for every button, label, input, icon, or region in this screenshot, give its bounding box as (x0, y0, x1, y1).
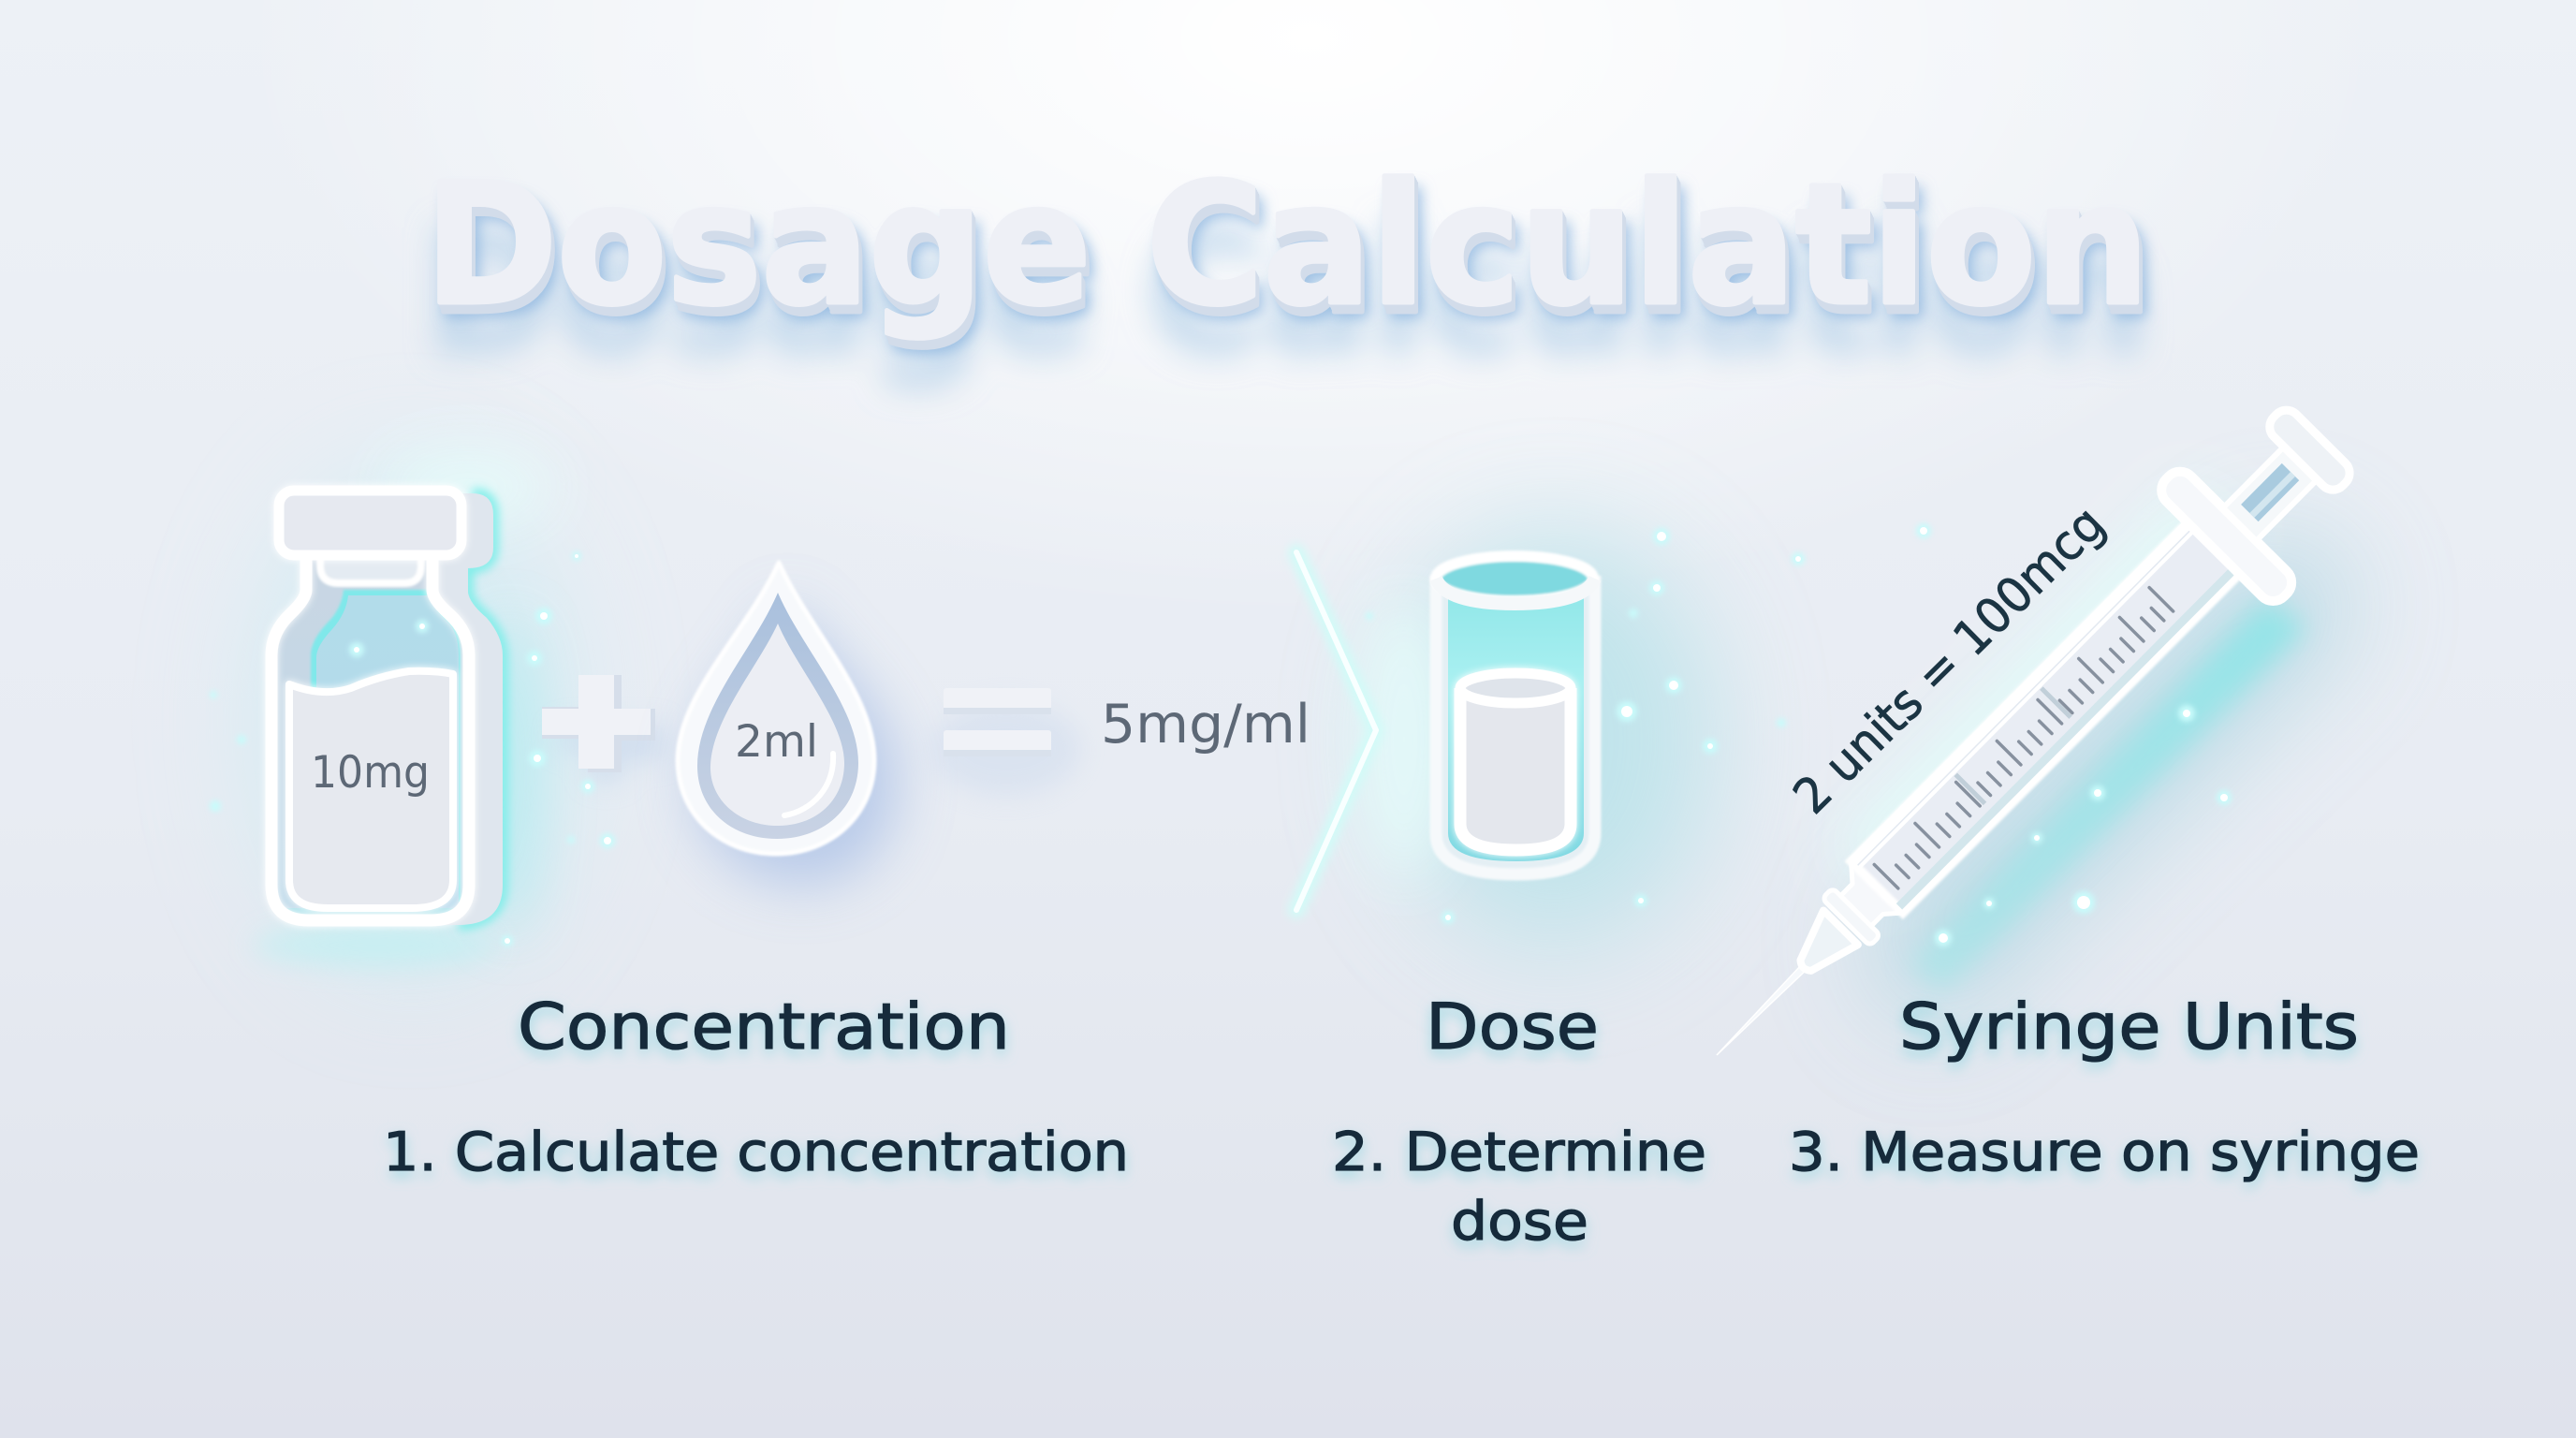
icon: drop (678, 563, 899, 885)
sub: barrel (1852, 515, 2247, 913)
sub: plunger stopper marks (1954, 686, 2072, 805)
title: Dosage Calculation (425, 148, 2149, 342)
sub: graduation ticks (1874, 588, 2174, 888)
arrow (1296, 552, 1376, 910)
icon: plus (542, 675, 665, 782)
sub: highlight (784, 754, 833, 815)
heading: Dose: Dose (1426, 990, 1599, 1064)
sub: measured dose (1460, 673, 1571, 850)
heading: Syringe Units: Syringe Units (1899, 990, 2359, 1064)
concentration result: 5mg/ml (1101, 694, 1310, 756)
heading: Concentration: Concentration (518, 990, 1010, 1064)
label: 2ml: 2ml (735, 716, 818, 768)
sub: needle (1714, 960, 1811, 1058)
icon: vial (253, 449, 571, 974)
step 2 text: dose (1451, 1191, 1588, 1253)
sparkles (210, 523, 2232, 946)
step 2 text (1332, 1122, 1706, 1253)
sub: hub (1785, 910, 1858, 984)
sub: flange (2155, 465, 2298, 608)
icon: syringe (1655, 381, 2381, 1111)
label: 10mg: 10mg (311, 747, 430, 799)
syringe units text: 2 units = 100mcg (1783, 496, 2115, 825)
glow: dose and arrow (1357, 534, 1713, 946)
step 1 text: 1. Calculate concentration (383, 1122, 1129, 1183)
glow: syringe (1835, 487, 2359, 1030)
icon: equals (931, 688, 1081, 796)
step 3 text: 3. Measure on syringe (1789, 1122, 2420, 1183)
sub: glass interior (271, 560, 469, 920)
sub: cap (279, 491, 461, 555)
step 2 text: 2. Determine (1332, 1122, 1706, 1183)
sub: plunger rod (2223, 446, 2319, 541)
sub: liquid (289, 671, 453, 908)
sub: collar (320, 558, 421, 583)
sub: backplate (459, 493, 503, 925)
icon: dose cup (1436, 556, 1595, 874)
sub: plunger head (2264, 404, 2355, 495)
